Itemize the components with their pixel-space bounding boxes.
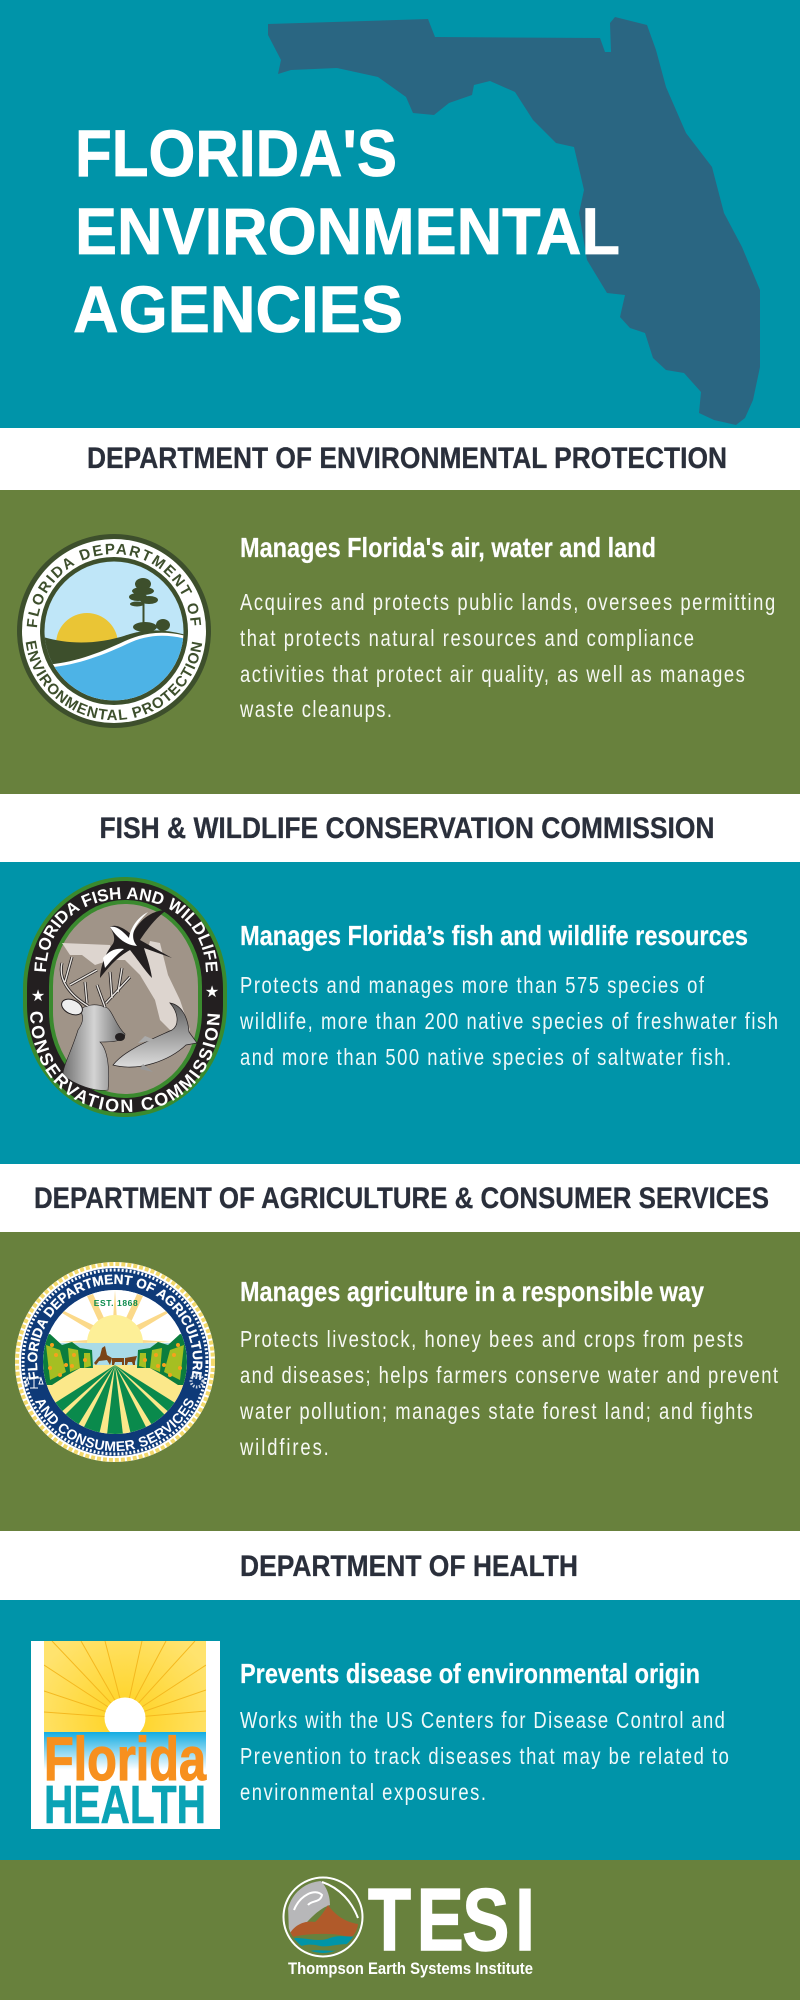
- heading band: Department of Health: DEPARTMENT OF HEALTH: [240, 1550, 578, 1583]
- heading band: Department of Environmental Protection: DEPARTMENT OF ENVIRONMENTAL PROTECTION: [87, 442, 727, 475]
- text: FWC description: [239, 973, 778, 1071]
- icon: Florida outline in seal: [62, 941, 190, 1040]
- heading band: Department of Health: [0, 1531, 800, 1600]
- text: institute name: Thompson Earth Systems Institute: [288, 1960, 533, 1978]
- heading band: Fish & Wildlife Conservation Commission: [0, 794, 800, 862]
- icon: pine tree and shrubs: [129, 578, 170, 632]
- icon: sun rays: [58, 1290, 172, 1343]
- icon: scales of justice: [25, 1376, 43, 1388]
- heading band: Department of Environmental Protection: [0, 428, 800, 490]
- text: FWC description: and more than 500 native species of saltwater fish.: [240, 1045, 731, 1071]
- footer panel: [0, 1860, 800, 2000]
- text: Agriculture description: and diseases; helps farmers conserve water and prevent: [240, 1363, 778, 1389]
- title: AGENCIES: [73, 272, 403, 346]
- heading band: Department of Agriculture & Consumer Services: [0, 1164, 800, 1232]
- text: DEP description: Acquires and protects public lands, oversees permitting: [240, 590, 775, 616]
- seal: Florida Agriculture: [15, 1262, 215, 1462]
- logo: TESI wordmark: TESI: [368, 1870, 535, 1969]
- title: [73, 116, 620, 346]
- seal: Florida DEP: ENVIRONMENTAL PROTECTION: [26, 640, 202, 720]
- panel: Department of Agriculture & Consumer Services: [0, 1232, 800, 1531]
- seal: Florida Agriculture: EST. 1868: [94, 1298, 138, 1308]
- logo: Florida Health: [31, 1641, 220, 1835]
- text: DEP description: waste cleanups.: [239, 697, 392, 723]
- seal: Florida FWC: CONSERVATION COMMISSION: [30, 1012, 220, 1112]
- icon: deer: [59, 957, 130, 1090]
- panel: Department of Environmental Protection: [0, 490, 800, 794]
- seal: Florida DEP: [17, 534, 211, 728]
- text: FWC description: wildlife, more than 200 native species of freshwater fish: [239, 1009, 778, 1035]
- header panel: [0, 0, 800, 428]
- text: DEP subtitle: Manages Florida's air, water and land: [240, 532, 656, 563]
- logo: Florida Health: Florida: [44, 1725, 207, 1793]
- text: Agriculture description: water pollution; manages state forest land; and fights: [239, 1399, 753, 1425]
- seal: Florida FWC: [23, 877, 227, 1117]
- icon: thumbprint: [191, 1375, 203, 1387]
- logo: Florida Health: HEALTH: [44, 1775, 206, 1835]
- icon: fish: [113, 1003, 197, 1072]
- text: Agriculture description: Protects livestock, honey bees and crops from pests: [240, 1327, 743, 1353]
- text: Agriculture subtitle: Manages agriculture in a responsible way: [240, 1276, 704, 1307]
- seal: Florida Agriculture: AND CONSUMER SERVICES: [35, 1398, 194, 1452]
- text: Agriculture description: [239, 1327, 778, 1461]
- text: Health description: [240, 1708, 729, 1806]
- title: FLORIDA'S: [75, 116, 397, 190]
- icon: swallow-tailed kite: [100, 910, 172, 978]
- text: Health description: environmental exposures.: [240, 1780, 486, 1806]
- field rows: [107, 1365, 123, 1435]
- seal: Florida FWC: FLORIDA FISH AND WILDLIFE: [34, 887, 218, 972]
- panel: Department of Health: [0, 1600, 800, 1860]
- Florida state silhouette: [268, 17, 760, 425]
- text: Agriculture description: wildfires.: [239, 1435, 329, 1461]
- seal: Florida FWC: ★: [205, 982, 219, 1001]
- seal: Florida FWC: ★: [31, 986, 45, 1005]
- text: DEP description: [239, 590, 775, 723]
- panel: Fish & Wildlife Conservation Commission: [0, 862, 800, 1164]
- heading band: Fish & Wildlife Conservation Commission: FISH & WILDLIFE CONSERVATION COMMISSION: [100, 812, 714, 845]
- orange groves: [40, 1334, 93, 1385]
- icon: rider and cattle: [94, 1346, 137, 1365]
- logo: TESI emblem: [284, 1878, 362, 1960]
- seal: Florida Agriculture: FLORIDA DEPARTMENT OF AGRICULTURE: [28, 1274, 202, 1380]
- text: FWC description: Protects and manages more than 575 species of: [240, 973, 704, 999]
- title: ENVIRONMENTAL: [75, 194, 620, 268]
- text: Health description: Works with the US Centers for Disease Control and: [240, 1708, 725, 1734]
- text: DEP description: that protects natural resources and compliance: [240, 626, 694, 652]
- seal: Florida DEP: FLORIDA DEPARTMENT OF: [26, 544, 202, 628]
- text: DEP description: activities that protect air quality, as well as manages: [240, 662, 745, 688]
- text: Health subtitle: Prevents disease of environmental origin: [240, 1658, 700, 1689]
- text: Health description: Prevention to track diseases that may be related to: [240, 1744, 729, 1770]
